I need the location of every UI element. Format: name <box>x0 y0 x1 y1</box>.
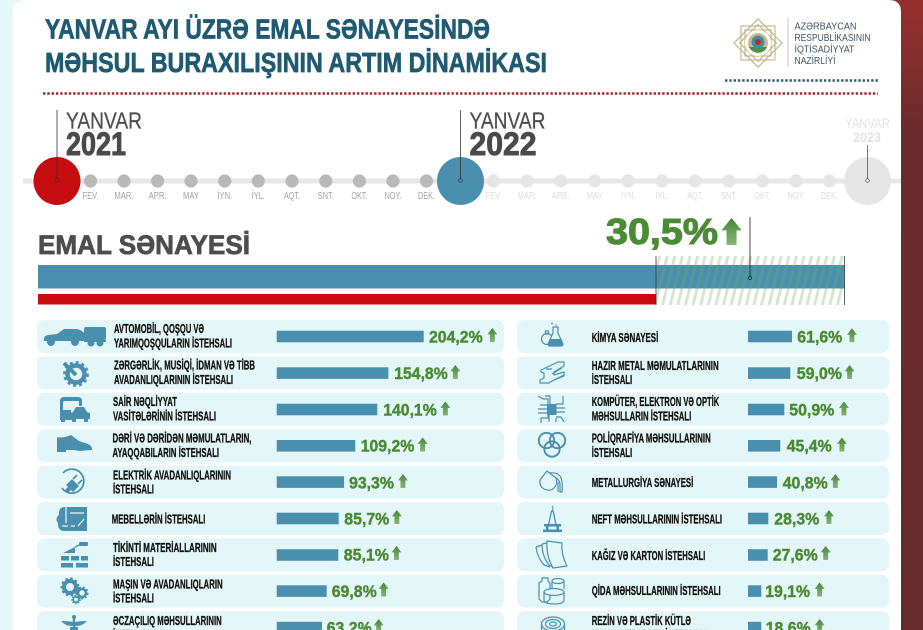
bar <box>748 404 784 415</box>
row: paper and cardboard <box>517 538 889 571</box>
label <box>113 540 217 569</box>
months 2022: MAY <box>587 191 603 202</box>
bar <box>748 549 768 561</box>
label <box>592 359 719 387</box>
label: ƏCZAÇILIQ MƏHSULLARININ <box>113 614 222 628</box>
months 2021: OKT. <box>351 191 367 202</box>
icon: plug <box>62 469 84 493</box>
row: computers, electronics, optics <box>517 393 889 426</box>
marker: January 2021 <box>34 108 142 205</box>
months 2022: OKT. <box>754 191 770 202</box>
label: İSTEHSALI <box>113 482 154 497</box>
months 2021: AQT. <box>284 191 300 202</box>
bar <box>277 585 327 597</box>
row: rubber and plastics <box>517 611 889 630</box>
bar <box>277 404 377 415</box>
row: pharmaceuticals <box>37 611 504 630</box>
label <box>592 394 719 423</box>
ministry name: RESPUBLİKASININ <box>794 31 870 44</box>
ministry name: İQTİSADİYYAT <box>794 42 854 56</box>
label: DƏRİ VƏ DƏRİDƏN MƏMULATLARIN, <box>112 431 252 446</box>
row: furniture <box>37 502 504 535</box>
title: YANVAR AYI ÜZRƏ EMAL SƏNAYESİNDƏ <box>45 14 490 44</box>
label: HAZIR METAL MƏMULATLARININ <box>592 359 719 373</box>
bar: January 2021 <box>38 294 656 304</box>
label: İSTEHSALI <box>592 372 632 387</box>
row: leather and footwear <box>37 429 504 462</box>
marker: January 2021: YANVAR <box>66 108 142 134</box>
label <box>112 431 252 460</box>
row: automobiles <box>37 320 504 353</box>
bar <box>748 476 777 488</box>
label: QİDA MƏHSULLARININ İSTEHSALI <box>592 583 721 598</box>
bar <box>748 331 792 342</box>
bar <box>748 622 761 630</box>
icon: pouring crucible <box>540 471 562 492</box>
label: AYAQQABILARIN İSTEHSALI <box>112 445 219 460</box>
icon: caduceus <box>61 615 87 630</box>
bar <box>748 367 790 379</box>
value: 45,4% <box>787 438 832 456</box>
ministry name <box>794 22 870 67</box>
value: 109,2% <box>361 438 415 456</box>
row: machinery and equipment <box>37 575 504 608</box>
label: NEFT MƏHSULLARININ İSTEHSALI <box>592 512 722 527</box>
marker: January 2021: 2021 <box>66 126 126 162</box>
timeline <box>23 108 901 205</box>
label <box>113 614 222 630</box>
label: MAŞIN VƏ AVADANLIQLARIN <box>113 577 223 591</box>
bar <box>277 367 388 379</box>
icon: circuit chip <box>538 396 565 423</box>
months 2022: İYL. <box>656 189 668 202</box>
months 2022: İYN. <box>621 189 636 202</box>
icon: car and trailer <box>44 327 106 346</box>
marker: January 2022: 2022 <box>470 126 536 162</box>
value: 28,3% <box>774 510 820 528</box>
title <box>45 14 547 78</box>
months 2022: FEV. <box>486 191 502 202</box>
label <box>114 358 255 387</box>
marker: January 2023 <box>844 115 891 205</box>
row: printing <box>517 429 889 462</box>
months 2021: APR. <box>149 191 167 202</box>
label: POLİQRAFİYA MƏHSULLARININ <box>592 431 711 446</box>
row: construction materials <box>37 538 504 571</box>
bar <box>748 585 761 597</box>
months 2022: APR. <box>552 191 570 202</box>
months 2021: İYN. <box>217 189 232 202</box>
label: MƏHSULLARIN İSTEHSALI <box>592 408 691 423</box>
hatched growth area <box>656 256 844 305</box>
value: 27,6% <box>773 547 818 565</box>
label <box>592 431 711 460</box>
value: 204,2% <box>429 328 483 346</box>
label: TİKİNTİ MATERİALLARININ <box>113 540 217 555</box>
months 2021 <box>82 174 435 202</box>
heading: manufacturing: EMAL SƏNAYESİ <box>38 230 250 260</box>
months 2022 <box>486 174 838 202</box>
icon: gear and wrench <box>64 362 88 386</box>
months 2021: FEV. <box>82 191 98 202</box>
label: REZİN VƏ PLASTİK KÜTLƏ <box>592 613 691 628</box>
icon: flasks <box>542 323 563 346</box>
label: AVTOMOBİL, QOŞQU VƏ <box>114 321 204 336</box>
label: İSTEHSALI <box>113 591 154 606</box>
months 2022: SNT. <box>721 191 737 202</box>
background: left strip <box>0 0 40 630</box>
label <box>114 321 232 350</box>
bar <box>277 513 339 524</box>
logo divider <box>788 18 789 67</box>
label <box>113 467 231 497</box>
label <box>113 394 216 424</box>
label: İSTEHSALI <box>592 445 632 460</box>
row: oil products <box>517 502 889 535</box>
bar <box>748 513 768 524</box>
row: finished metal products <box>517 356 889 389</box>
value: 69,8% <box>332 583 377 601</box>
label: KOMPÜTER, ELEKTRON VƏ OPTİK <box>592 394 719 409</box>
value: 61,6% <box>797 328 843 346</box>
icon: trowel and bricks <box>61 542 88 568</box>
ministry name: NAZİRLİYİ <box>794 54 836 67</box>
label: VASİTƏLƏRİNİN İSTEHSALI <box>113 408 216 424</box>
bar <box>277 476 344 488</box>
label: KİMYA SƏNAYESİ <box>592 330 658 345</box>
value: 19,1% <box>765 583 810 601</box>
label: YARIMQOŞQULARIN İSTEHSALI <box>114 336 232 350</box>
label: METALLURGİYA SƏNAYESİ <box>592 475 693 490</box>
row: chemicals <box>517 320 889 353</box>
row: electrical equipment <box>37 466 504 499</box>
label: ZƏRGƏRLİK, MUSİQİ, İDMAN VƏ TİBB <box>114 358 255 373</box>
months 2021: DEK. <box>418 191 435 202</box>
icon: shoe <box>57 435 92 452</box>
row: jewellery, music, sports, medical <box>37 356 504 389</box>
label <box>113 577 223 606</box>
label: KAĞIZ VƏ KARTON İSTEHSALI <box>592 548 705 563</box>
months 2022: NOY. <box>788 191 804 202</box>
icon: food containers <box>539 578 564 604</box>
icon: gears <box>62 578 88 604</box>
value: 59,0% <box>797 365 842 383</box>
bar: January 2022 <box>38 265 844 288</box>
bar <box>277 622 322 630</box>
row: food <box>517 575 889 608</box>
row: metallurgy <box>517 466 889 499</box>
value: 85,1% <box>344 547 389 565</box>
value: 140,1% <box>383 401 437 419</box>
logo: ministry emblem <box>734 19 782 67</box>
months 2021: MAY <box>183 191 199 202</box>
months 2021: NOY. <box>384 191 402 202</box>
value: 93,3% <box>349 474 394 492</box>
main comparison chart <box>38 211 844 305</box>
months 2022: DEK. <box>821 191 838 202</box>
label <box>592 613 707 630</box>
value: 154,8% <box>394 365 448 383</box>
marker: January 2022: YANVAR <box>470 108 546 134</box>
icon: oil rig <box>543 506 562 532</box>
label: MEBELLƏRİN İSTEHSALI <box>112 512 205 527</box>
row: other transport <box>37 393 504 426</box>
months 2021: SNT. <box>318 191 334 202</box>
value: 50,9% <box>789 401 835 419</box>
marker: January 2022 <box>437 108 546 205</box>
ministry name: AZƏRBAYCAN <box>794 22 856 32</box>
label: AVADANLIQLARININ İSTEHSALI <box>114 372 233 387</box>
growth value 30,5%: 30,5% <box>606 211 718 252</box>
months 2021: MAR. <box>114 191 134 202</box>
icon: bus and car <box>60 397 90 422</box>
bar <box>277 549 338 561</box>
icon: steel beam <box>540 362 564 383</box>
title: MƏHSUL BURAXILIŞININ ARTIM DİNAMİKASI <box>45 47 547 78</box>
marker: January 2023: 2023 <box>853 129 881 145</box>
marker: January 2023: YANVAR <box>845 115 890 131</box>
icon: overlapping rings <box>539 433 565 457</box>
icon: paper sheets <box>536 541 567 568</box>
months 2021: İYL. <box>252 189 265 202</box>
months 2022: AQT. <box>687 191 703 202</box>
label: SAİR NƏQLİYYAT <box>113 394 177 409</box>
bar <box>277 331 424 342</box>
months 2022: MAR. <box>518 191 536 202</box>
bar <box>277 440 355 452</box>
bar <box>748 440 780 452</box>
background: right dark red strip <box>880 0 923 630</box>
icon: rolls and plans <box>56 507 87 531</box>
icon: roll <box>542 617 564 630</box>
value: 85,7% <box>344 510 390 528</box>
value: 40,8% <box>783 474 828 492</box>
label: ELEKTRİK AVADANLIQLARININ <box>113 467 231 482</box>
label: İSTEHSALI <box>113 554 154 569</box>
